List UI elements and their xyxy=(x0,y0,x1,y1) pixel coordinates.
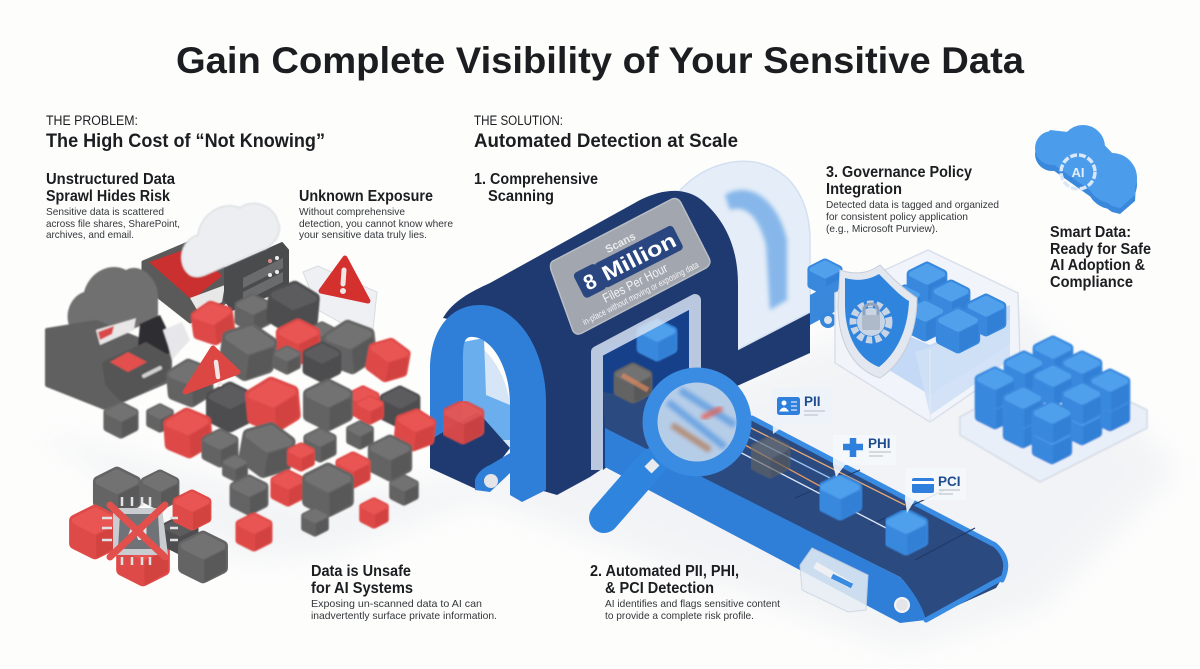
text block: data unsafe for AI: for AI Systems xyxy=(311,580,413,597)
heading: the problem xyxy=(46,113,325,152)
text block: governance policy integration: Detected data is tagged and organized xyxy=(826,199,999,211)
text block: unknown exposure: your sensitive data truly lies. xyxy=(299,229,427,241)
icon: orange-red cube at entrance xyxy=(447,405,481,442)
heading: the problem: The High Cost of “Not Knowing” xyxy=(46,131,325,152)
text block: unknown exposure: detection, you cannot know where xyxy=(299,218,453,230)
text block: unknown exposure: Without comprehensive xyxy=(299,206,405,218)
icon: gray filing cabinet xyxy=(47,315,190,408)
text block: unstructured data sprawl: Sensitive data is scattered xyxy=(46,206,164,218)
text block: smart data xyxy=(1050,224,1151,291)
callout: PHI tag xyxy=(833,435,896,477)
icon: magnifying glass xyxy=(604,375,744,518)
icon: AI brain cloud xyxy=(1035,125,1137,214)
text block: governance policy integration: (e.g., Microsoft Purview). xyxy=(826,223,938,235)
icon: folder with warning triangle xyxy=(303,258,377,330)
text block: smart data: Compliance xyxy=(1050,274,1133,291)
icon: glass governance box with cubes xyxy=(835,250,1020,422)
icon: scanned translucent cube xyxy=(755,440,788,476)
icon: glass data panel with 8 Million label: Scans xyxy=(603,231,638,256)
icon: white cloud xyxy=(182,203,279,277)
icon: scan lines xyxy=(730,425,905,530)
icon: glass data panel with 8 Million label xyxy=(550,199,710,334)
icon: AI brain cloud: AI xyxy=(1072,165,1084,180)
text block: unstructured data sprawl xyxy=(46,171,180,241)
icon: flagged blue cube one xyxy=(823,479,859,517)
heading: the solution xyxy=(474,113,738,152)
text block: smart data: AI Adoption & xyxy=(1050,257,1145,274)
text block: comprehensive scanning xyxy=(474,171,598,205)
text block: unstructured data sprawl: across file shares, SharePoint, xyxy=(46,218,180,230)
icon: glass data panel with 8 Million label: Million xyxy=(598,229,680,286)
text block: governance policy integration: Integration xyxy=(826,181,902,198)
text block: unknown exposure: Unknown Exposure xyxy=(299,188,433,205)
icon: navy scanner body xyxy=(443,191,738,495)
icon: glass data panel with 8 Million label: in-place without moving or exposing data xyxy=(581,260,700,327)
icon: glass tunnel rear xyxy=(677,161,810,386)
text block: unstructured data sprawl: Unstructured Data xyxy=(46,171,175,188)
icon: crossed-out AI chip with cubes xyxy=(75,472,225,583)
text block: smart data: Ready for Safe xyxy=(1050,241,1151,258)
text block: governance policy integration: 3. Governance Policy xyxy=(826,164,972,181)
text block: unstructured data sprawl: archives, and email. xyxy=(46,229,134,241)
text block: automated detection: to provide a complete risk profile. xyxy=(605,610,754,622)
heading: the solution: Automated Detection at Scale xyxy=(474,131,738,152)
callout: PCI tag xyxy=(905,468,966,513)
text block: automated detection: AI identifies and flags sensitive content xyxy=(605,598,780,610)
text block: unstructured data sprawl: Sprawl Hides Risk xyxy=(46,188,170,205)
icon: cubes inside scanner xyxy=(618,324,675,401)
heading: the solution: THE SOLUTION: xyxy=(474,113,563,128)
text block: data unsafe for AI: inadvertently surface private information. xyxy=(311,610,497,622)
callout: PHI tag: PHI xyxy=(868,436,891,451)
callout: PII tag: PII xyxy=(804,394,821,409)
callout: PCI tag: PCI xyxy=(938,474,961,489)
icon: finished blue cube stack on tray xyxy=(960,340,1147,482)
text block: data unsafe for AI: Exposing un-scanned data to AI can xyxy=(311,598,482,610)
icon: glass data panel with 8 Million label: Files Per Hour xyxy=(600,260,671,306)
chart-like pile: scattered gray and red data cubes xyxy=(108,285,434,549)
text block: smart data: Smart Data: xyxy=(1050,224,1131,241)
icon: glass data panel with 8 Million label: 8 xyxy=(580,269,601,295)
icon: blue entry arch xyxy=(430,305,546,502)
text block: data unsafe for AI: Data is Unsafe xyxy=(311,563,411,580)
icon: outgoing blue cube and belt xyxy=(810,263,840,326)
text block: comprehensive scanning: 1. Comprehensive xyxy=(474,171,598,188)
text block: governance policy integration xyxy=(826,164,999,235)
icon: crossed-out AI chip with cubes: AI xyxy=(126,520,148,545)
text block: automated detection: 2. Automated PII, PHI, xyxy=(590,563,739,580)
icon: red warning triangle in pile xyxy=(185,348,238,392)
icon: server rack xyxy=(225,243,288,310)
text block: automated detection xyxy=(590,563,780,622)
text block: governance policy integration: for consistent policy application xyxy=(826,211,968,223)
text block: data unsafe for AI xyxy=(311,563,497,622)
icon: shield with lock and gear xyxy=(838,265,917,378)
title: Gain Complete Visibility of Your Sensitive Data xyxy=(176,40,1024,81)
text block: unknown exposure xyxy=(299,188,453,241)
text block: automated detection: & PCI Detection xyxy=(605,580,714,597)
icon: conveyor belt xyxy=(603,392,1006,623)
icon: scanner window interior xyxy=(603,305,692,470)
icon: red tray box xyxy=(143,240,230,322)
icon: small glass clip on conveyor xyxy=(800,548,868,612)
text block: comprehensive scanning: Scanning xyxy=(488,188,554,205)
icon: gray cloud xyxy=(68,267,158,339)
icon: flagged blue cube two xyxy=(889,514,925,552)
callout: PII tag xyxy=(772,388,832,434)
icon: scanner window glass frame xyxy=(597,300,695,470)
heading: the problem: THE PROBLEM: xyxy=(46,113,138,128)
